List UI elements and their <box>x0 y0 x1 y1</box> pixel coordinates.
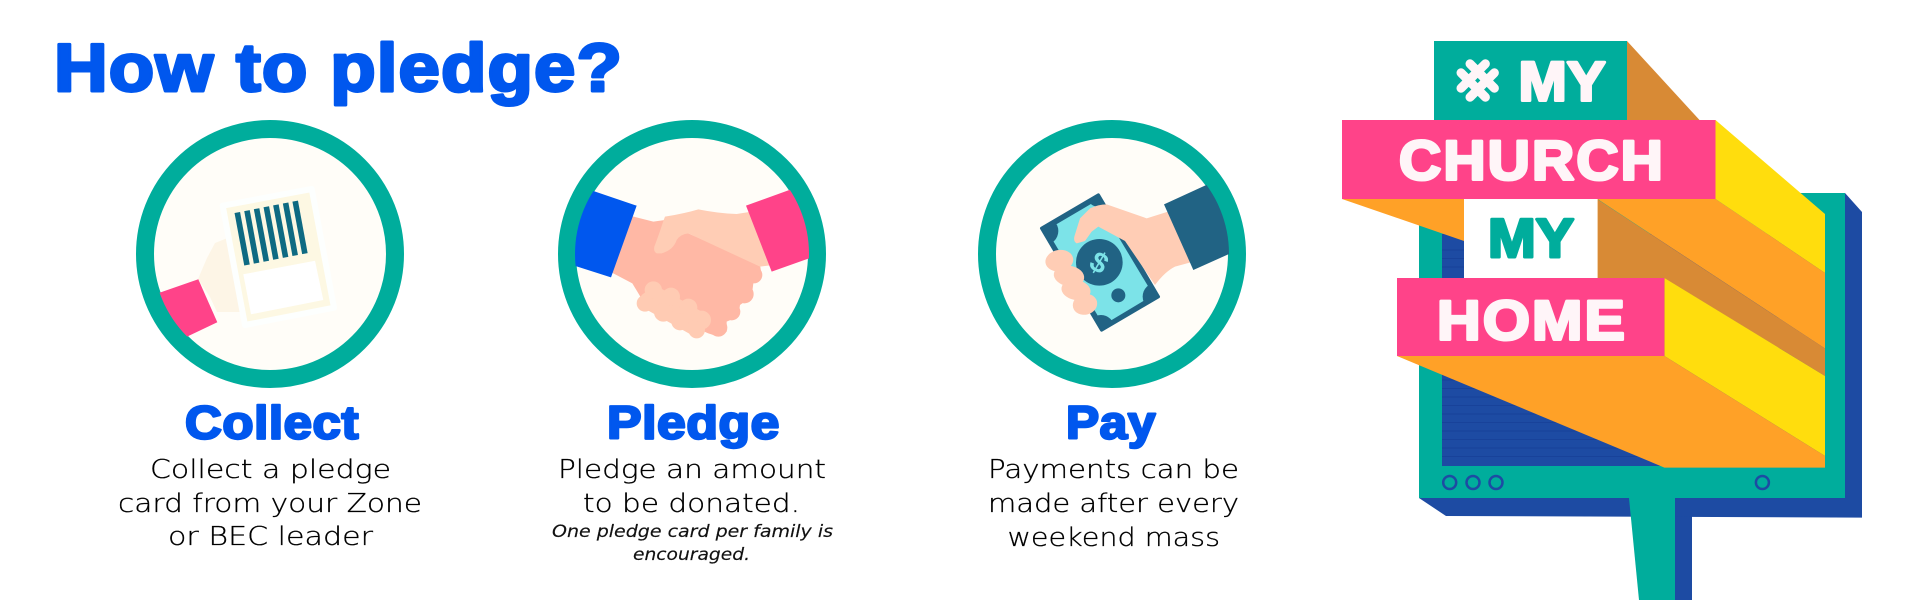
3D block faces <box>1342 41 1825 468</box>
banner: MY with cross icon: MY <box>1518 50 1606 112</box>
billboard buttons <box>1443 476 1769 489</box>
banner: CHURCH <box>1342 120 1716 199</box>
text: collect description <box>118 455 422 552</box>
text: pledge description: to be donated. <box>583 489 800 519</box>
icon: hand holding pledge card <box>145 129 395 379</box>
billboard screen <box>1442 234 1825 466</box>
icon: cross emblem <box>1461 64 1494 97</box>
text: pay description: made after every <box>988 489 1239 519</box>
billboard post <box>1675 510 1692 600</box>
text: pay description <box>988 455 1239 553</box>
text: pledge description <box>558 455 826 519</box>
panel: pay <box>987 129 1242 553</box>
banner: MY with cross icon <box>1434 41 1627 120</box>
banner: MY white: MY <box>1488 207 1574 269</box>
billboard shadow <box>1419 193 1862 518</box>
heading: Collect: Collect <box>185 396 359 448</box>
text: collect description: or BEC leader <box>168 522 373 552</box>
text: pay description: Payments can be <box>988 455 1239 485</box>
heading: Pledge: Pledge <box>607 396 780 448</box>
text: collect description: card from your Zone <box>118 489 422 519</box>
heading: Pay: Pay <box>1066 396 1156 448</box>
panel: collect <box>118 129 422 552</box>
text: pledge note: encouraged. <box>633 545 750 565</box>
icon: handshake <box>562 129 842 379</box>
logo: My Church My Home billboard <box>1342 41 1862 600</box>
banner: MY white <box>1464 199 1598 278</box>
panel: pledge <box>552 129 842 565</box>
icon: hand paying with banknote <box>987 129 1242 379</box>
text: collect description: Collect a pledge <box>150 455 391 485</box>
banner: HOME <box>1397 278 1664 356</box>
title: How to pledge? <box>54 30 623 106</box>
billboard frame <box>1419 193 1845 600</box>
text: pledge note <box>552 522 833 565</box>
text: pledge description: Pledge an amount <box>558 455 826 485</box>
icon: hand paying with banknote: $ <box>1084 245 1114 281</box>
text: pledge note: One pledge card per family is <box>552 522 833 542</box>
banner: HOME: HOME <box>1437 288 1627 352</box>
banner: CHURCH: CHURCH <box>1399 128 1665 192</box>
text: pay description: weekend mass <box>1008 523 1220 553</box>
